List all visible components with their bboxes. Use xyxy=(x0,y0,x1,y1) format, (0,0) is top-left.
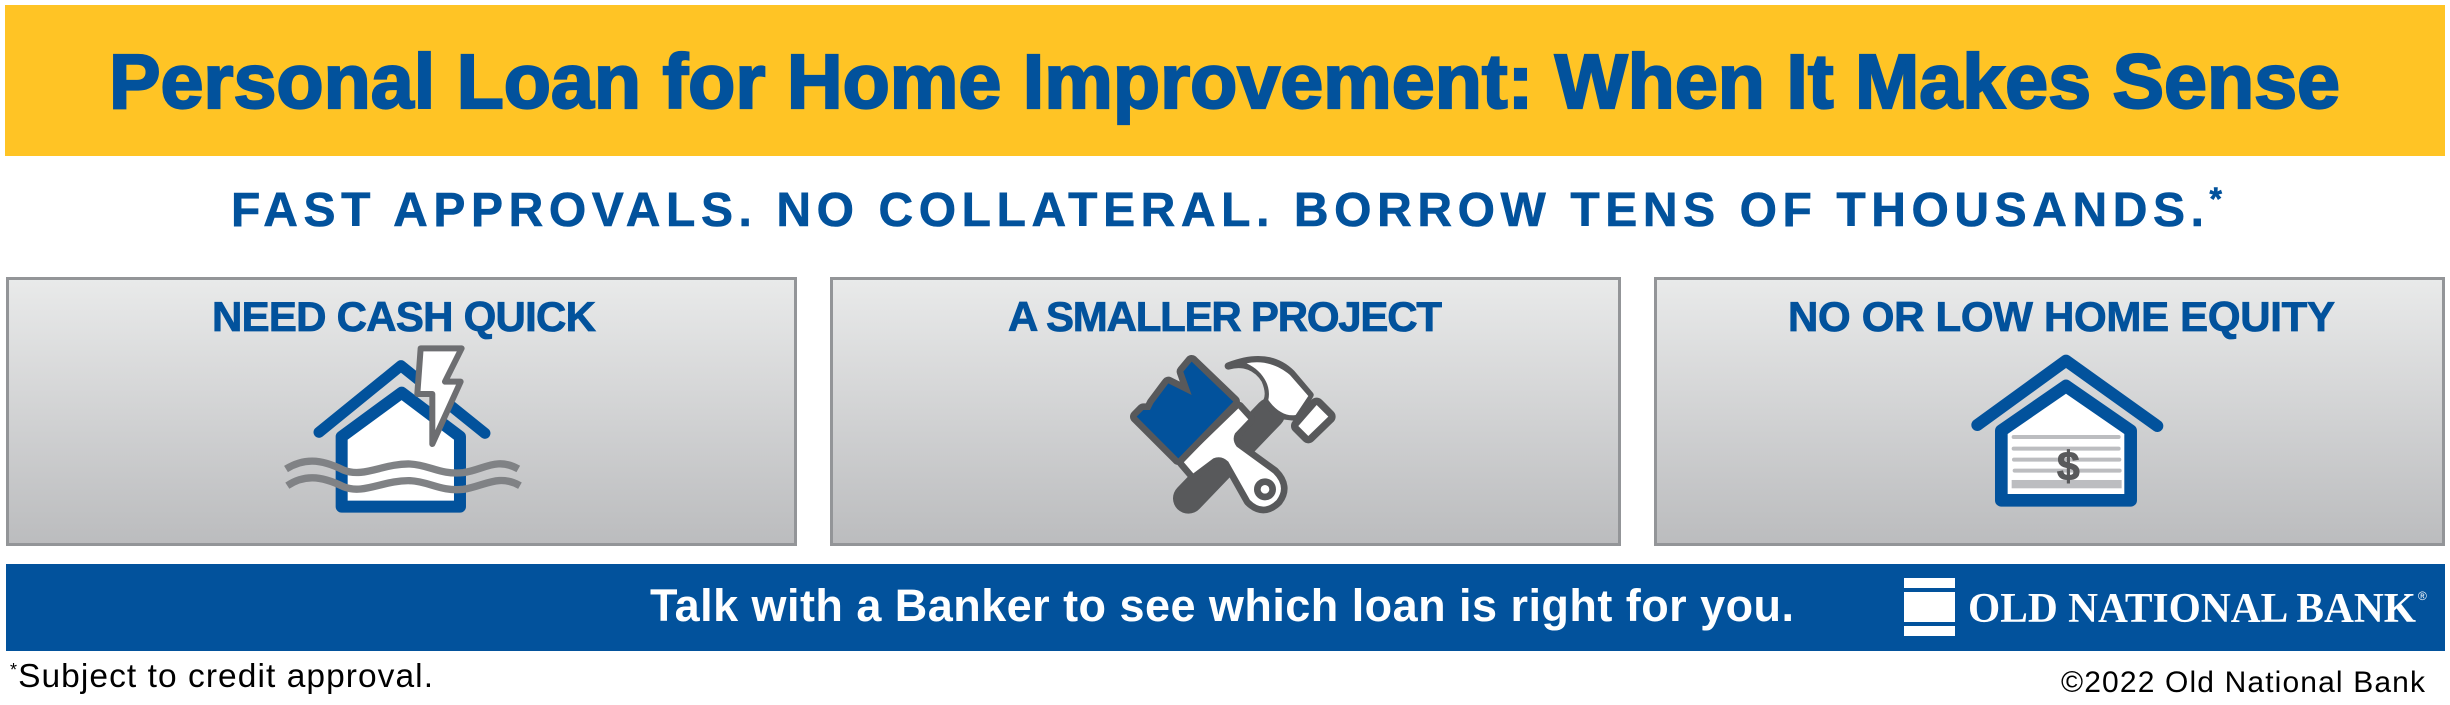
copyright: ©2022 Old National Bank xyxy=(2061,666,2426,699)
icon: house with garage door and dollar sign: $ xyxy=(2057,443,2080,489)
call-to-action text: Talk with a Banker to see which loan is right for you. xyxy=(650,580,1794,631)
logo: old national bank: ® xyxy=(2418,589,2427,603)
panel heading: no or low home equity: NO OR LOW HOME EQUITY xyxy=(1788,293,2335,340)
title banner xyxy=(5,5,2445,156)
panel: a smaller project xyxy=(832,278,1620,544)
subheading: * xyxy=(2210,181,2223,217)
logo: old national bank xyxy=(1904,578,2427,636)
panel: no or low home equity xyxy=(1656,278,2444,544)
subheading: FAST APPROVALS. NO COLLATERAL. BORROW TENS OF THOUSANDS. xyxy=(231,184,2204,237)
call-to-action bar xyxy=(6,564,2445,651)
panel heading: need cash quick: NEED CASH QUICK xyxy=(212,293,596,340)
panel: need cash quick xyxy=(8,278,796,544)
title: Personal Loan for Home Improvement: When It Makes Sense xyxy=(109,39,2340,125)
panel heading: a smaller project: A SMALLER PROJECT xyxy=(1008,293,1442,340)
footnote: * xyxy=(10,660,17,680)
icon: flooded house with lightning xyxy=(286,348,520,507)
icon: paint brush and hammer xyxy=(1137,360,1328,507)
logo: old national bank: OLD NATIONAL BANK xyxy=(1968,586,2416,632)
footnote: Subject to credit approval. xyxy=(18,658,433,695)
icon: house with garage door and dollar sign xyxy=(1977,361,2157,500)
